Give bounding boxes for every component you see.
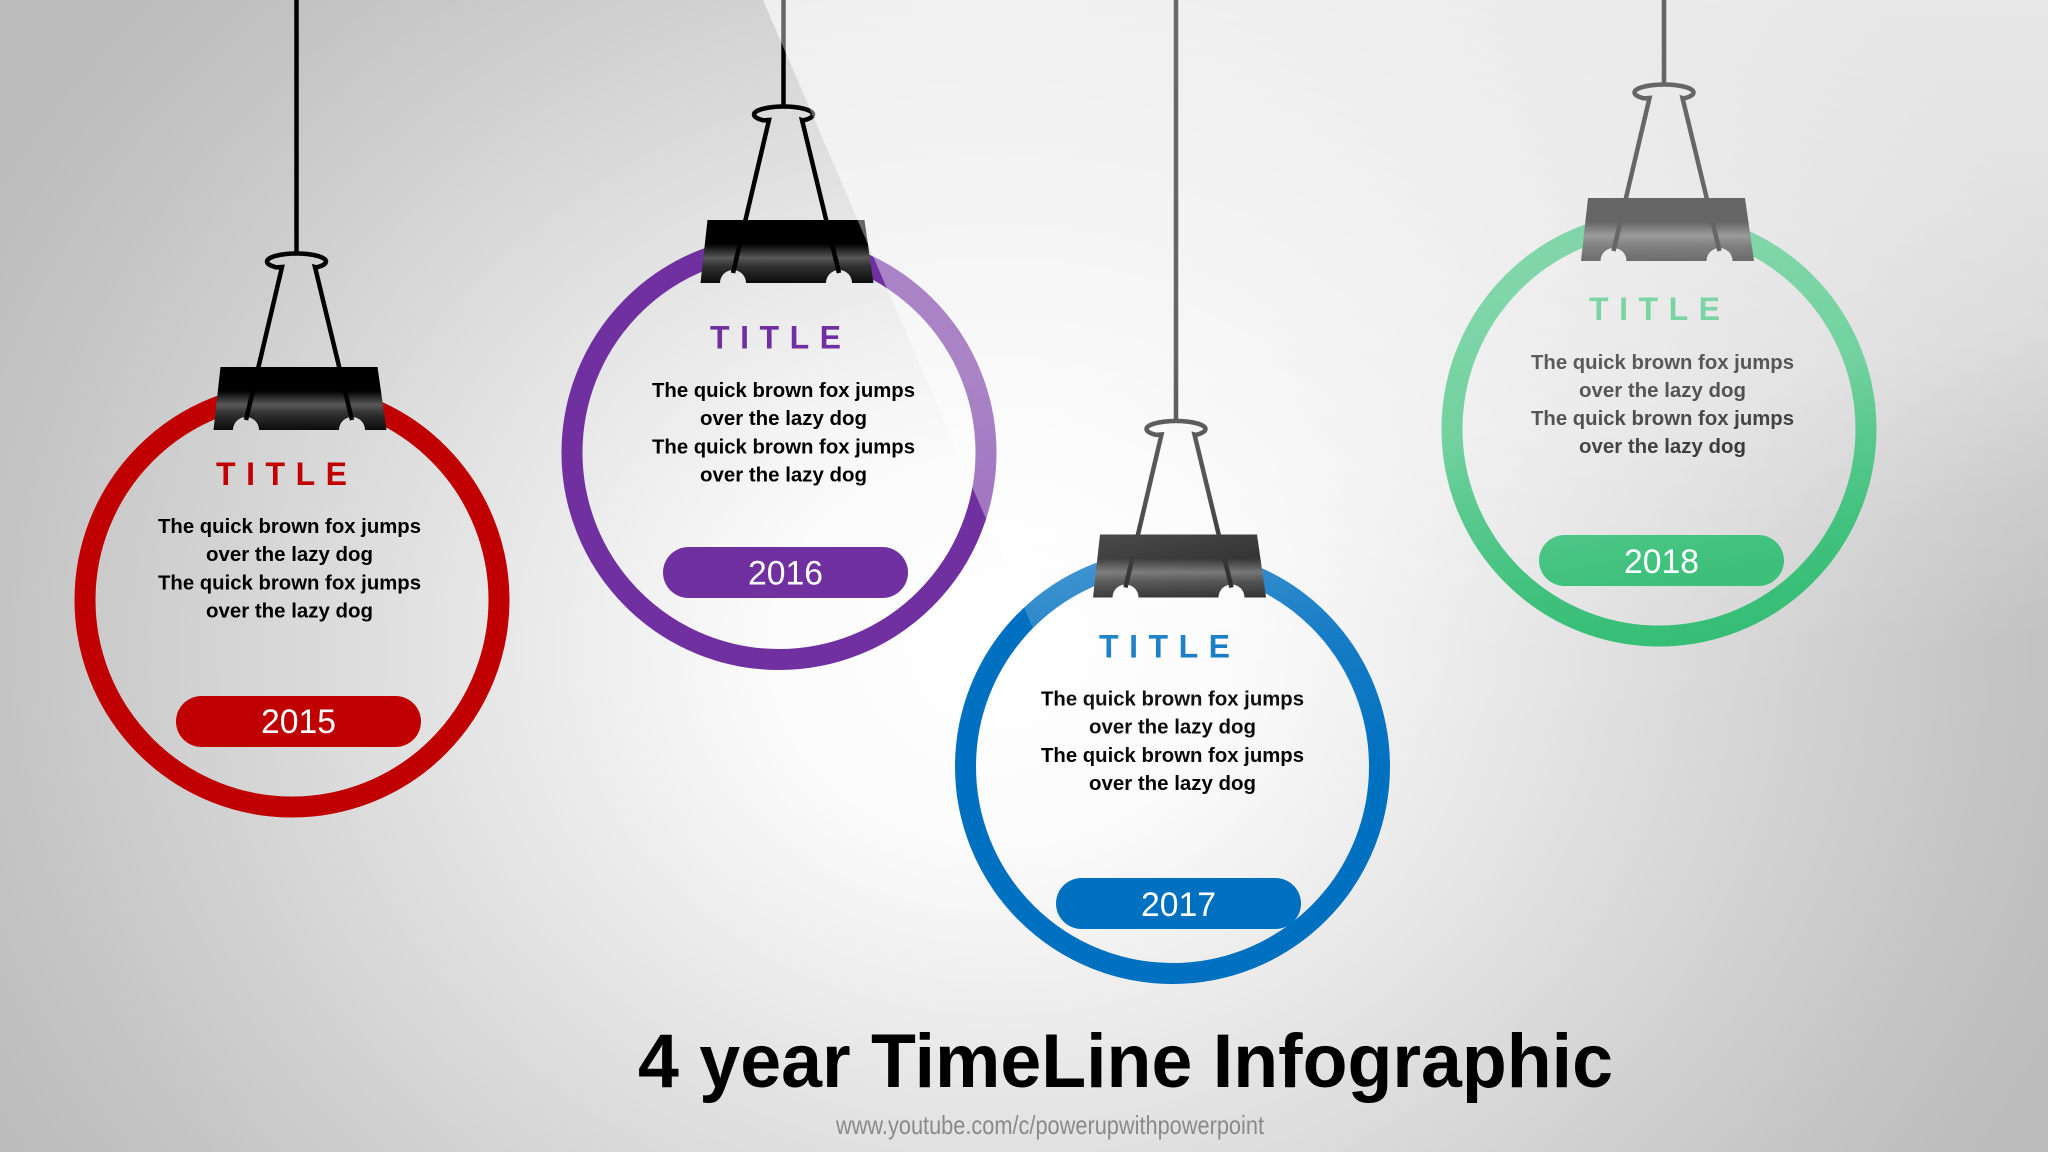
panel: 2015	[85, 0, 499, 807]
year pill 2016: 2016	[748, 554, 823, 592]
text block 2015: over the lazy dog	[206, 600, 373, 622]
year pill 2018: 2018	[1624, 543, 1699, 581]
subtitle url: www.youtube.com/c/powerupwithpowerpoint	[835, 1110, 1265, 1140]
text block 2015	[158, 516, 421, 622]
text block 2017	[1041, 688, 1304, 795]
text block 2015: The quick brown fox jumps	[158, 572, 421, 594]
year pill 2016	[663, 547, 908, 598]
ring 2017	[966, 560, 1380, 974]
heading: title 2015: TITLE	[216, 456, 347, 492]
gloss overlay	[763, 0, 2048, 1152]
text block 2017: over the lazy dog	[1089, 773, 1256, 795]
hanging string 2017	[1174, 0, 1178, 421]
icon: binder clip 2015	[214, 254, 386, 430]
icon: binder clip 2016	[700, 107, 874, 283]
panel: 2018	[1452, 0, 1866, 636]
text block 2017: The quick brown fox jumps	[1041, 745, 1304, 767]
text block 2017: over the lazy dog	[1089, 716, 1256, 738]
text block 2016: The quick brown fox jumps	[652, 436, 915, 458]
text block 2016: over the lazy dog	[700, 464, 867, 486]
year pill 2017: 2017	[1141, 886, 1216, 924]
panel: 2016	[572, 0, 986, 660]
text block 2016: The quick brown fox jumps	[652, 380, 915, 402]
heading: title 2016: TITLE	[710, 320, 841, 356]
text block 2015: The quick brown fox jumps	[158, 516, 421, 538]
hanging string 2018	[1662, 0, 1666, 85]
text block 2018: The quick brown fox jumps	[1531, 408, 1794, 430]
ring 2016	[572, 246, 986, 660]
ring 2018	[1452, 222, 1866, 636]
year pill 2015	[176, 696, 421, 747]
icon: binder clip 2018	[1581, 85, 1754, 261]
background light wash	[763, 0, 2048, 640]
text block 2017: The quick brown fox jumps	[1041, 688, 1304, 710]
text block 2018: over the lazy dog	[1579, 436, 1746, 458]
year pill 2015: 2015	[261, 703, 336, 741]
year pill 2017	[1056, 878, 1301, 929]
panel: 2017	[966, 0, 1380, 974]
hanging string 2016	[781, 0, 786, 107]
ring 2015	[85, 393, 499, 807]
heading: title 2017: TITLE	[1099, 628, 1230, 664]
text block 2018: over the lazy dog	[1579, 380, 1746, 402]
text block 2018: The quick brown fox jumps	[1531, 352, 1794, 374]
text block 2018	[1531, 352, 1794, 458]
text block 2016	[652, 380, 915, 486]
title: 4 year TimeLine Infographic	[638, 1019, 1613, 1104]
text block 2016: over the lazy dog	[700, 408, 867, 430]
year pill 2018	[1539, 535, 1784, 586]
text block 2015: over the lazy dog	[206, 544, 373, 566]
heading: title 2018: TITLE	[1589, 291, 1720, 327]
hanging string 2015	[294, 0, 299, 254]
icon: binder clip 2017	[1093, 421, 1266, 598]
